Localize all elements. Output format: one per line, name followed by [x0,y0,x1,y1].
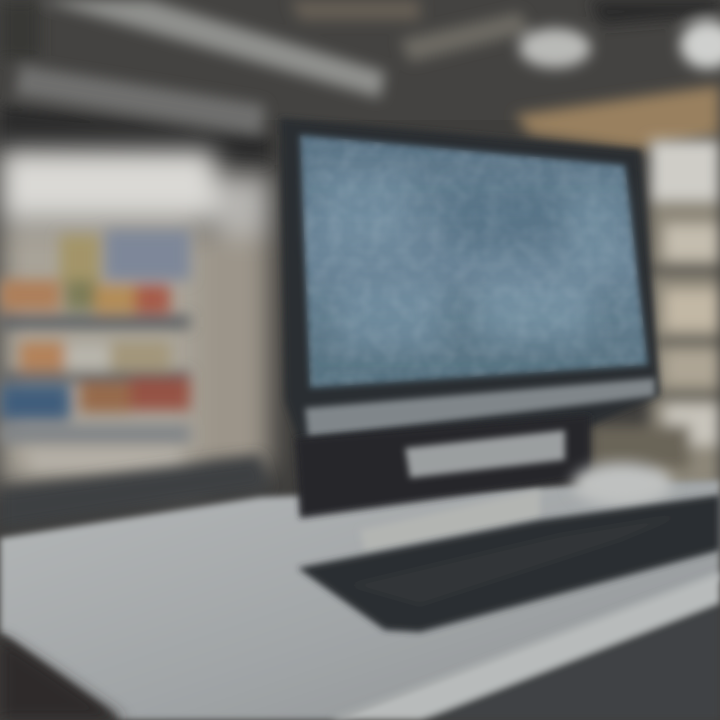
counter front edge [330,572,720,720]
ceiling beams [0,0,720,165]
monitor body [280,118,660,445]
stand light bar [405,430,565,478]
counter top [0,480,720,720]
keyboard [298,495,720,632]
monitor [280,118,660,445]
monitor lower bezel [305,378,655,438]
screen data texture [304,139,643,386]
monitor screen [300,135,648,388]
panel: right shelves [590,140,720,490]
shelf base [0,455,270,530]
screen pattern [320,170,620,350]
mouse [572,462,672,506]
stand base bar [360,490,540,552]
wood ceiling panel [515,85,720,150]
panel: left store wall [0,150,270,485]
monitor stand [295,415,590,518]
dark corner bottom left [0,635,125,720]
shelves: colored products [0,230,190,470]
